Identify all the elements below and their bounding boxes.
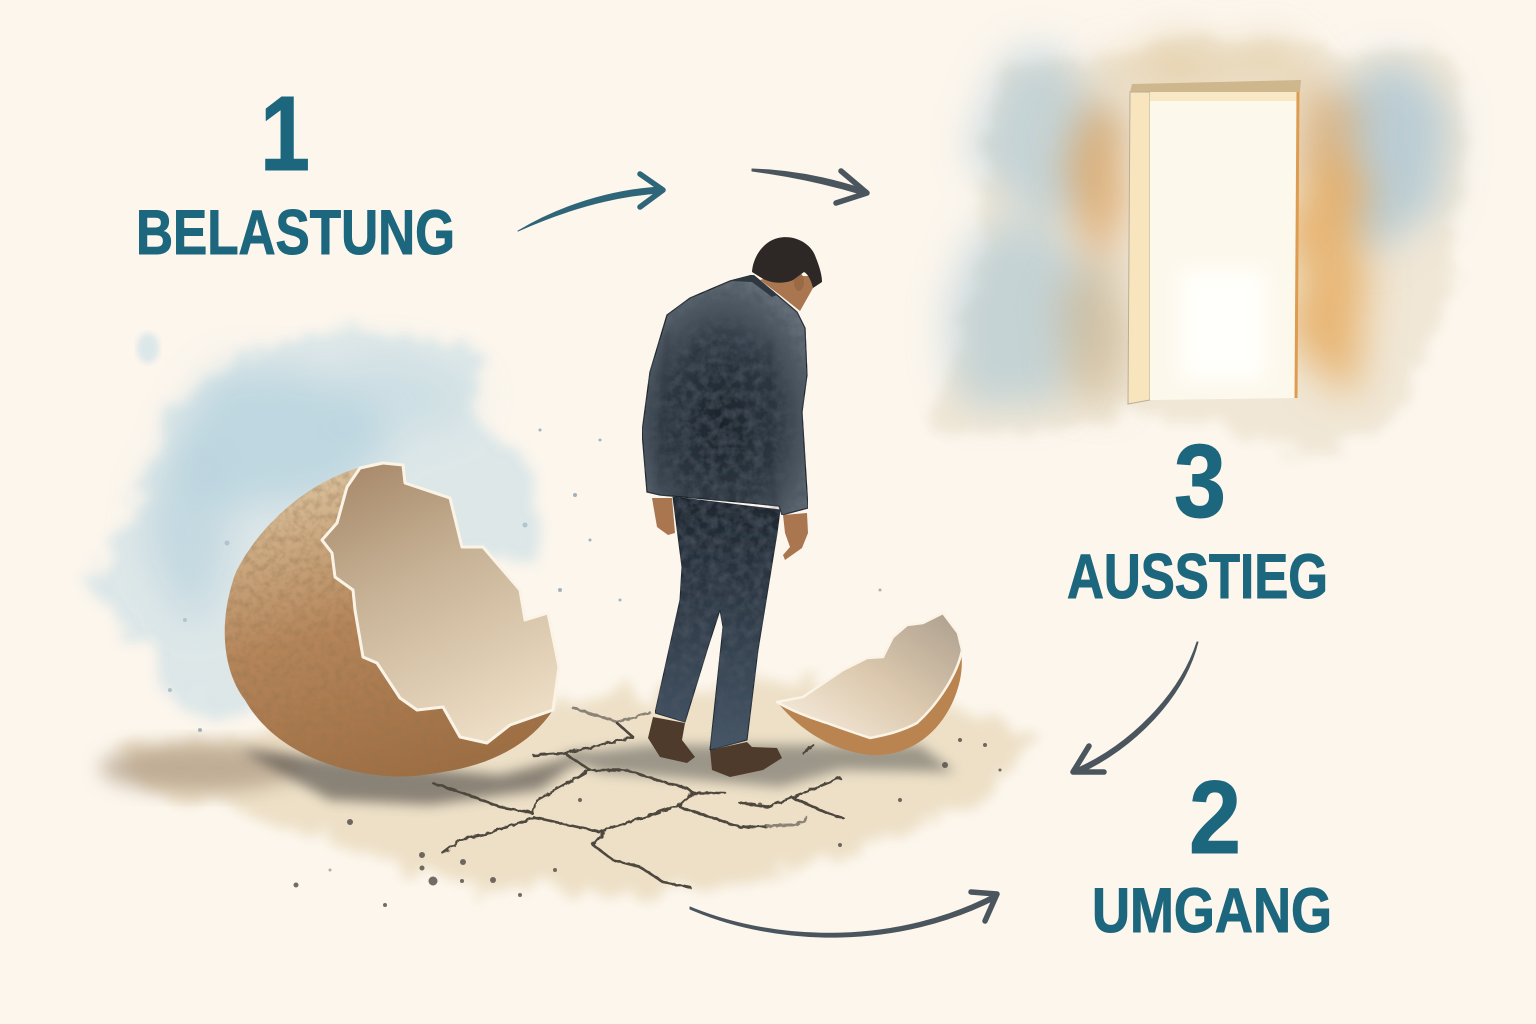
heading Umgang: UMGANG xyxy=(1092,876,1332,946)
right door edge xyxy=(1296,92,1298,398)
collar xyxy=(730,275,777,297)
illustration: man looking down xyxy=(642,237,822,777)
blue base wash behind egg xyxy=(100,330,545,720)
orange washes beside door xyxy=(1059,43,1368,400)
right shoe xyxy=(710,742,782,777)
shell interior xyxy=(777,613,962,738)
number 1: 1 xyxy=(260,75,310,193)
blue darker wash xyxy=(150,360,475,615)
illustration: door with watercolor wash xyxy=(930,35,1465,465)
cracks xyxy=(433,708,843,887)
pale splash dot xyxy=(137,333,159,363)
door light opening xyxy=(1150,92,1299,400)
arrow: ausstieg to umgang xyxy=(1073,642,1198,774)
door top reveal xyxy=(1150,92,1299,101)
arrow: ground to umgang xyxy=(690,892,997,937)
heading Ausstieg: AUSSTIEG xyxy=(1067,542,1328,612)
ground wash xyxy=(110,680,1045,895)
left shoe xyxy=(648,717,695,763)
jacket sleeve shadow xyxy=(660,330,775,510)
arrow: belastung to door xyxy=(518,174,663,231)
number 3: 3 xyxy=(1174,424,1226,540)
right hand xyxy=(783,513,808,560)
number 2: 2 xyxy=(1189,760,1241,876)
label 3 Ausstieg xyxy=(1067,424,1328,612)
grey shadow under egg xyxy=(240,750,590,805)
door bright core xyxy=(1180,270,1265,380)
shell exterior xyxy=(777,613,962,755)
hair xyxy=(752,237,822,288)
illustration: ground and cracks xyxy=(100,428,1045,907)
grey shadow under man xyxy=(560,745,955,787)
blue washes xyxy=(948,50,1448,415)
label 1 Belastung xyxy=(136,75,455,268)
illustration: large broken eggshell xyxy=(100,330,559,776)
door frame left xyxy=(1128,92,1150,404)
soil and splash speckles xyxy=(294,738,1002,907)
ear xyxy=(794,273,804,291)
arrow: toward door xyxy=(752,169,867,203)
egg inner surface xyxy=(322,463,559,743)
left hand xyxy=(652,498,675,535)
label 2 Umgang xyxy=(1092,760,1332,946)
door lintel xyxy=(1130,80,1301,92)
heading Belastung: BELASTUNG xyxy=(136,198,455,268)
face and neck xyxy=(760,276,813,311)
warm soil patch left xyxy=(100,744,300,792)
egg outer shell xyxy=(225,463,553,776)
pale base wash xyxy=(930,35,1465,465)
illustration: small broken eggshell xyxy=(777,613,962,755)
trousers xyxy=(655,497,780,750)
jacket xyxy=(642,275,808,515)
